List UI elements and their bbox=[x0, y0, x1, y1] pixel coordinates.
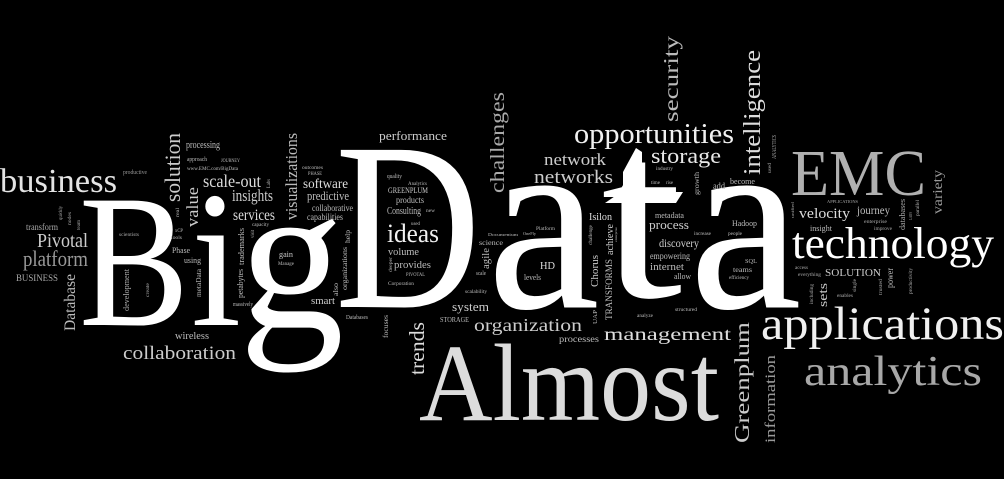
small words: Big gaps cluster: Phase bbox=[172, 245, 190, 255]
small words: process cluster: internet bbox=[650, 261, 684, 273]
small words: inside D cluster: PIVOTAL bbox=[406, 273, 425, 278]
small words: inside D cluster: deeper bbox=[389, 257, 394, 272]
small words: right cluster: APPLICATIONS bbox=[827, 199, 858, 204]
small words: centre cluster: scale bbox=[476, 271, 486, 277]
small words: inside D cluster: quality bbox=[387, 174, 402, 180]
small words: right cluster: including bbox=[810, 283, 815, 304]
small words: process cluster: add bbox=[713, 181, 725, 191]
word: EMC: EMC bbox=[791, 137, 926, 210]
small words: left cluster: transform bbox=[26, 222, 59, 233]
small words: Big gaps cluster: JOURNEY bbox=[221, 158, 240, 164]
word: platform: platform bbox=[23, 246, 88, 271]
small words: process cluster: become bbox=[730, 177, 755, 186]
small words: right cluster: productivity bbox=[909, 267, 914, 294]
small words: software cluster: software bbox=[303, 177, 348, 192]
word: velocity: velocity bbox=[799, 206, 851, 222]
small words: process cluster: industry bbox=[656, 166, 673, 172]
small words: Big gaps cluster: tools bbox=[171, 235, 182, 241]
word: security: security bbox=[659, 35, 683, 122]
small words: centre cluster: Documentum bbox=[488, 232, 519, 237]
small words: software cluster bbox=[302, 165, 390, 338]
word: analytics: analytics bbox=[804, 349, 982, 395]
small words: right cluster: LABS bbox=[908, 212, 913, 220]
word: Big bbox=[79, 139, 344, 373]
word: networks: networks bbox=[534, 167, 613, 188]
small words: centre cluster: STORAGE bbox=[440, 316, 469, 324]
word: business: business bbox=[0, 163, 117, 200]
small words: Big gaps cluster: xCP bbox=[175, 229, 183, 234]
small words: centre cluster: achieve bbox=[605, 223, 616, 255]
word: Big: g bbox=[239, 139, 344, 373]
word: ideas: ideas bbox=[387, 219, 439, 248]
small words: right cluster: databases bbox=[898, 199, 907, 230]
small words: right cluster: parallel bbox=[916, 199, 921, 216]
word: storage: storage bbox=[651, 143, 721, 168]
small words: right cluster: unified bbox=[790, 201, 795, 218]
small words: process cluster: efficiency bbox=[729, 274, 749, 281]
word: opportunities: opportunities bbox=[574, 118, 734, 150]
small words: inside D cluster bbox=[387, 174, 435, 287]
small words: process cluster: SQL bbox=[745, 258, 757, 265]
small words: Big gaps cluster: petabytes bbox=[236, 269, 245, 298]
small words: software cluster: collaborative bbox=[312, 203, 353, 213]
small words: left cluster: scientists bbox=[119, 232, 139, 238]
small words: process cluster: process bbox=[649, 217, 689, 232]
small words: left cluster: create bbox=[146, 282, 151, 297]
small words: Big gaps cluster: services bbox=[233, 207, 275, 224]
small words: software cluster: Databases bbox=[346, 314, 368, 321]
small words: Big gaps cluster: Manage bbox=[278, 261, 295, 267]
word: organization: organization bbox=[474, 315, 582, 335]
small words: process cluster: allow bbox=[674, 272, 691, 281]
small words: process cluster: empowering bbox=[650, 251, 690, 261]
word: information: information bbox=[763, 354, 779, 443]
small words: right cluster: power bbox=[885, 268, 895, 288]
word: Greenplum: Greenplum bbox=[730, 322, 754, 443]
small words: process cluster: analyze bbox=[637, 314, 654, 319]
small words: process cluster: Hadoop bbox=[732, 219, 757, 228]
small words: inside D cluster: products bbox=[396, 195, 424, 205]
small words: Big gaps cluster: www.EMC.com/BigData bbox=[187, 166, 239, 172]
small words: software cluster: PHASE bbox=[308, 172, 322, 177]
small words: Big gaps cluster: insights bbox=[232, 186, 273, 205]
small words: centre cluster: agile bbox=[480, 248, 492, 269]
small words: centre cluster: TRANSFORMS bbox=[605, 259, 615, 320]
small words: centre cluster: processes bbox=[559, 335, 599, 345]
small words: right cluster: ANALYTICS bbox=[772, 135, 778, 159]
word: Data: D bbox=[335, 93, 481, 359]
small words: Big gaps cluster: massively bbox=[233, 302, 253, 308]
word: performance: performance bbox=[379, 128, 447, 143]
small words: left cluster: team bbox=[77, 220, 82, 230]
small words: left cluster: productive bbox=[123, 169, 147, 176]
word: Almost: Almost bbox=[419, 322, 719, 444]
small words: centre cluster: challenge bbox=[589, 224, 594, 245]
small words: Big gaps cluster: Labs bbox=[267, 179, 272, 188]
word: challenges: challenges bbox=[487, 92, 509, 193]
small words: process cluster: metadata bbox=[655, 211, 684, 220]
small words: process cluster: discovery bbox=[659, 236, 699, 250]
small words: inside D cluster: used bbox=[411, 221, 420, 227]
word: Data bbox=[335, 76, 802, 364]
small words: centre cluster: science bbox=[479, 238, 504, 247]
small words: Big gaps cluster: smart bbox=[311, 295, 335, 307]
small words: right cluster: access bbox=[795, 266, 808, 271]
small words: left cluster: development bbox=[122, 268, 131, 311]
small words: Big gaps cluster: approach bbox=[187, 156, 208, 163]
small words: Big gaps cluster: scale-out bbox=[203, 171, 261, 191]
small words: software cluster: predictive bbox=[307, 188, 349, 203]
small words: process cluster: growth bbox=[692, 172, 701, 195]
small words: centre cluster: UAP bbox=[592, 310, 599, 324]
small words: inside D cluster: new bbox=[426, 209, 435, 214]
small words: left cluster: nodes bbox=[68, 212, 73, 225]
small words: software cluster: organizations bbox=[341, 247, 349, 290]
small words: Big gaps cluster bbox=[171, 140, 340, 342]
small words: software cluster: focuses bbox=[382, 315, 390, 338]
word: Big: i bbox=[191, 151, 241, 367]
word: Pivotal: Pivotal bbox=[37, 230, 88, 252]
small words: centre cluster: scalability bbox=[465, 289, 487, 295]
word: trends: trends bbox=[405, 322, 429, 375]
small words: inside D cluster: provides bbox=[394, 260, 431, 271]
small words: right cluster: used bbox=[768, 162, 773, 173]
small words: inside D cluster: Corporation bbox=[388, 281, 414, 287]
small words: right cluster: everything bbox=[798, 272, 821, 278]
small words: centre cluster: Platform bbox=[536, 225, 556, 232]
small words: process cluster: time bbox=[651, 180, 661, 186]
small words: centre cluster: HD bbox=[540, 260, 555, 272]
word: visualizations: visualizations bbox=[282, 133, 301, 220]
small words: inside D cluster: Consulting bbox=[387, 206, 421, 217]
word: Database: Database bbox=[62, 274, 79, 331]
small words: right cluster: SOLUTION bbox=[825, 268, 881, 279]
small words: process cluster: teams bbox=[733, 265, 752, 274]
word: applications: applications bbox=[761, 298, 1004, 350]
small words: process cluster: people bbox=[728, 232, 743, 237]
small words: Big gaps cluster: visit bbox=[251, 229, 256, 238]
word: Big: B bbox=[79, 156, 189, 367]
small words: inside D cluster: Analytics bbox=[408, 181, 427, 187]
word: Data: t bbox=[601, 84, 683, 348]
small words: Big gaps cluster: gain bbox=[279, 250, 293, 259]
small words: inside D cluster: volume bbox=[388, 247, 420, 258]
word: intelligence: intelligence bbox=[740, 50, 766, 175]
word: Data: a bbox=[689, 76, 802, 364]
small words: right cluster: insight bbox=[810, 223, 833, 233]
small words: Big gaps cluster: wireless bbox=[175, 331, 209, 342]
small words: process cluster bbox=[637, 166, 757, 319]
small words: left cluster bbox=[16, 169, 151, 311]
small words: Big gaps cluster: metaData bbox=[195, 268, 203, 297]
small words: left cluster: quickly bbox=[59, 206, 64, 220]
small words: process cluster: increase bbox=[694, 232, 712, 237]
small words: right cluster: sets bbox=[815, 283, 830, 307]
small words: centre cluster: enterprise bbox=[614, 226, 618, 242]
small words: right cluster: improve bbox=[874, 227, 893, 232]
word: network: network bbox=[544, 150, 607, 169]
small words: centre cluster bbox=[440, 212, 618, 345]
small words: inside D cluster: GREENPLUM bbox=[388, 186, 428, 195]
small words: Big gaps cluster: capacity bbox=[252, 223, 270, 228]
small words: process cluster: rise bbox=[666, 181, 674, 186]
small words: Big gaps cluster: real bbox=[176, 207, 181, 217]
small words: centre cluster: Chorus bbox=[589, 255, 601, 287]
small words: centre cluster: system bbox=[452, 300, 489, 314]
small words: centre cluster: OneFly bbox=[523, 231, 537, 236]
small words: software cluster: outcomes bbox=[302, 165, 323, 171]
word: collaboration: collaboration bbox=[123, 343, 237, 364]
small words: right cluster: single bbox=[853, 278, 858, 292]
small words: Big gaps cluster: trademarks bbox=[237, 228, 246, 265]
small words: right cluster: enterprise bbox=[864, 219, 888, 225]
word: variety: variety bbox=[931, 170, 946, 214]
small words: centre cluster: Isilon bbox=[589, 212, 612, 223]
word: value: value bbox=[183, 187, 202, 227]
word: management: management bbox=[604, 324, 731, 344]
small words: right cluster bbox=[768, 135, 921, 307]
small words: Big gaps cluster: processing bbox=[186, 140, 220, 151]
small words: process cluster: structured bbox=[675, 307, 697, 313]
small words: right cluster: trusted bbox=[879, 278, 884, 295]
small words: software cluster: help bbox=[344, 229, 352, 243]
small words: Big gaps cluster: using bbox=[184, 255, 202, 265]
small words: right cluster: journey bbox=[856, 203, 890, 217]
small words: software cluster: capabilities bbox=[307, 212, 343, 222]
small words: Big gaps cluster: also bbox=[332, 282, 340, 296]
word: technology: technology bbox=[792, 219, 994, 268]
word: solution: solution bbox=[160, 133, 185, 202]
word: Data: a bbox=[487, 76, 600, 364]
small words: right cluster: enables bbox=[837, 293, 853, 299]
small words: left cluster: BUSINESS bbox=[16, 273, 58, 283]
small words: centre cluster: levels bbox=[524, 273, 541, 282]
